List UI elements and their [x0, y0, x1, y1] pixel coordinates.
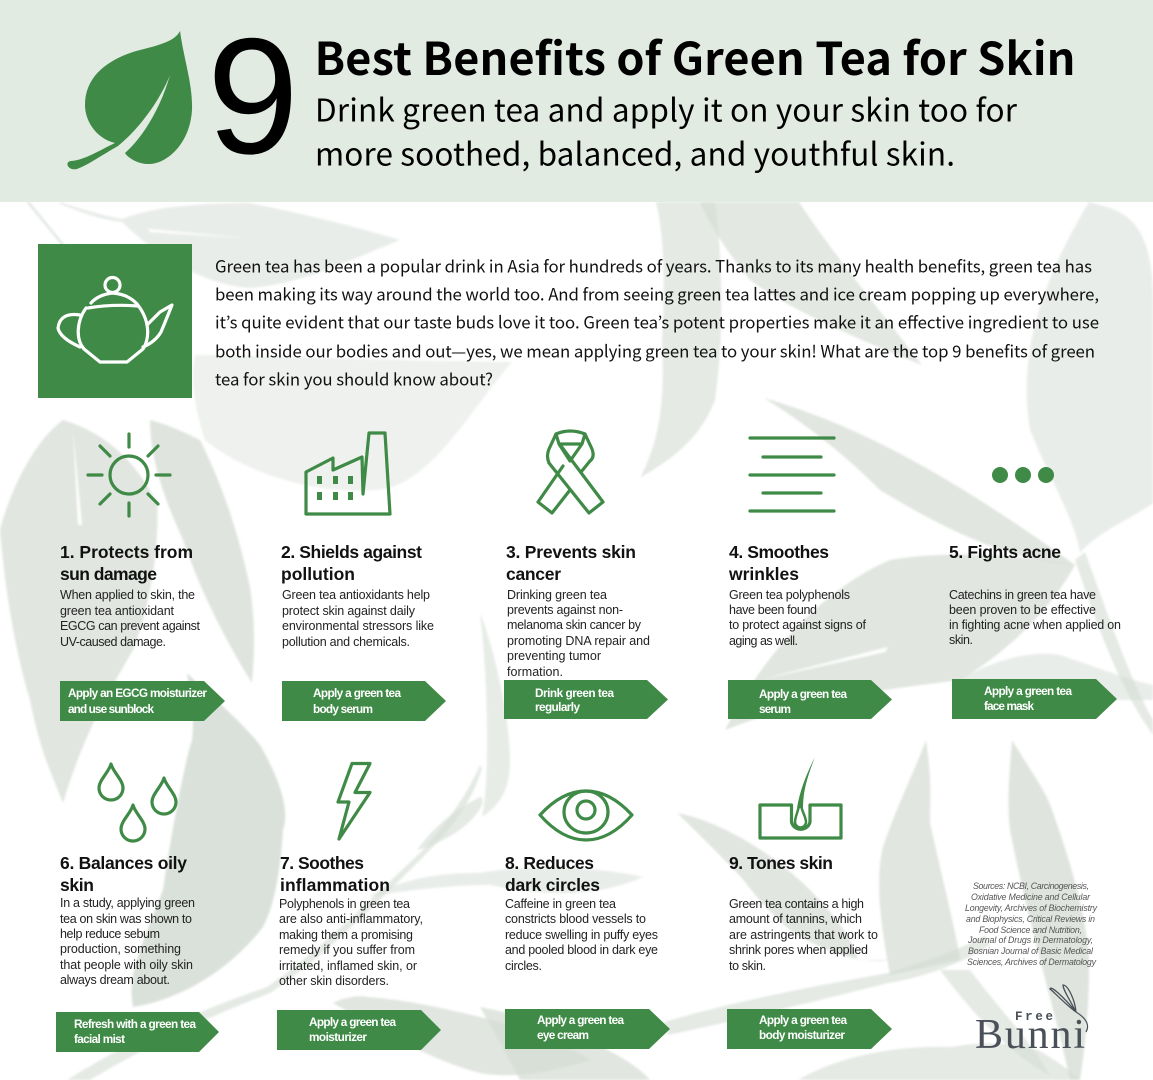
- heading 6: 6. Balances oily: [60, 853, 187, 873]
- logo: Free Bunni: Bunni: [975, 1012, 1085, 1058]
- heading 1: sun damage: [60, 564, 157, 584]
- icon: factory: [306, 433, 390, 514]
- text 3: formation.: [507, 665, 563, 679]
- icon: eye: [540, 791, 632, 840]
- text 4: [729, 588, 867, 648]
- icon: water drops: [99, 764, 176, 841]
- text 6: help reduce sebum: [60, 927, 160, 941]
- text 9: are astringents that work to: [729, 928, 878, 942]
- text 7: [279, 897, 423, 988]
- tip arrow 3: regularly: [535, 700, 580, 714]
- intro paragraph: both inside our bodies and out—yes, we mean applying green tea to your skin! What are the top 9 benefits of green: [215, 338, 1095, 362]
- big numeral 9: 9: [207, 4, 299, 188]
- heading 9: 9. Tones skin: [729, 853, 833, 873]
- panel: 9 tones skin: [727, 757, 892, 1049]
- sources: Journal of Drugs in Dermatology,: [967, 935, 1093, 945]
- text 2: protect skin against daily: [282, 604, 416, 618]
- sources: Food Science and Nutrition,: [979, 925, 1082, 935]
- tip arrow 3: [504, 680, 668, 719]
- text 7: making them a promising: [279, 928, 413, 942]
- heading 5: 5. Fights acne: [949, 542, 1061, 562]
- heading 4: [728, 542, 829, 584]
- text 6: [60, 896, 195, 987]
- heading 8: dark circles: [505, 875, 600, 895]
- text 1: When applied to skin, the: [60, 588, 195, 602]
- text 6: tea on skin was shown to: [60, 912, 192, 926]
- text 4: aging as well.: [729, 634, 798, 648]
- text 6: that people with oily skin: [60, 958, 193, 972]
- text 8: constricts blood vessels to: [505, 912, 646, 926]
- subtitle: [315, 86, 1018, 176]
- intro paragraph: Green tea has been a popular drink in Asia for hundreds of years. Thanks to its many health benefits, green tea has: [215, 254, 1092, 278]
- text 7: Polyphenols in green tea: [279, 897, 410, 911]
- text 8: Caffeine in green tea: [505, 897, 616, 911]
- sources: [965, 881, 1098, 967]
- tip arrow 2: Apply a green tea: [313, 686, 401, 700]
- tip arrow 7: moisturizer: [309, 1030, 367, 1044]
- text 7: are also anti-inflammatory,: [279, 912, 423, 926]
- heading 3: cancer: [506, 564, 561, 584]
- text 5: in fighting acne when applied on: [949, 618, 1121, 632]
- panel: teapot icon square: [38, 244, 192, 398]
- tip arrow 8: [505, 1009, 670, 1049]
- sources: and Biophysics, Critical Reviews in: [966, 914, 1095, 924]
- heading 2: [281, 542, 422, 584]
- tip arrow 1: [60, 681, 225, 721]
- heading 3: 3. Prevents skin: [506, 542, 636, 562]
- logo: Free Bunni: [975, 985, 1088, 1058]
- text 8: and pooled blood in dark eye: [505, 943, 658, 957]
- tip arrow 2: body serum: [313, 702, 373, 716]
- tip arrow 6: Refresh with a green tea: [74, 1017, 196, 1031]
- tip arrow 5: [952, 679, 1117, 719]
- text 3: melanoma skin cancer by: [507, 618, 642, 632]
- text 9: shrink pores when applied: [729, 943, 868, 957]
- heading 6: skin: [60, 875, 94, 895]
- text 6: always dream about.: [60, 973, 170, 987]
- text 8: circles.: [505, 959, 542, 973]
- tip arrow 9: Apply a green tea: [759, 1013, 847, 1027]
- header band: [0, 0, 1153, 202]
- text 1: [60, 588, 201, 649]
- text 3: prevents against non-: [507, 603, 623, 617]
- subtitle: more soothed, balanced, and youthful skin.: [315, 130, 955, 176]
- text 2: environmental stressors like: [282, 619, 434, 633]
- heading 4: 4. Smoothes: [729, 542, 829, 562]
- tip arrow 4: [728, 680, 892, 719]
- text 1: green tea antioxidant: [60, 604, 175, 618]
- tip arrow 2: [282, 681, 446, 721]
- tip arrow 7: Apply a green tea: [309, 1015, 396, 1029]
- text 4: to protect against signs of: [729, 618, 867, 632]
- text 9: to skin.: [729, 959, 766, 973]
- text 6: In a study, applying green: [60, 896, 195, 910]
- text 5: Catechins in green tea have: [949, 588, 1096, 602]
- sources: Oxidative Medicine and Cellular: [971, 892, 1091, 902]
- heading 4: wrinkles: [728, 564, 799, 584]
- tip arrow 4: serum: [759, 702, 791, 716]
- text 5: [949, 588, 1121, 647]
- text 2: Green tea antioxidants help: [282, 588, 430, 602]
- tip arrow 9: [727, 1009, 892, 1049]
- panel: 2 shields against pollution: [281, 433, 446, 721]
- heading 7: inflammation: [280, 875, 390, 895]
- heading 2: 2. Shields against: [281, 542, 422, 562]
- panel: 1 protects from sun damage: [60, 434, 225, 721]
- text 7: irritated, inflamed skin, or: [279, 959, 417, 973]
- heading 8: [505, 853, 600, 895]
- panel: 6 balances oily skin: [56, 764, 219, 1052]
- text 4: have been found: [729, 603, 817, 617]
- text 9: [729, 897, 878, 973]
- text 9: amount of tannins, which: [729, 912, 862, 926]
- text 5: been proven to be effective: [949, 603, 1096, 617]
- panel: 8 reduces dark circles: [505, 791, 670, 1049]
- text 2: [282, 588, 434, 649]
- logo: Free Bunni: Free: [1015, 1010, 1053, 1024]
- heading 3: [506, 542, 636, 584]
- text 2: pollution and chemicals.: [282, 635, 410, 649]
- sources: Longevity, Archives of Biochemistry: [965, 903, 1098, 913]
- heading 7: [280, 853, 390, 895]
- intro paragraph: been making its way around the world too. And from seeing green tea lattes and ice cream popping up everywhere,: [215, 282, 1099, 306]
- tip arrow 5: face mask: [984, 699, 1034, 713]
- title: Best Benefits of Green Tea for Skin: [314, 23, 1076, 88]
- tip arrow 8: Apply a green tea: [537, 1013, 624, 1027]
- text 8: [505, 897, 658, 973]
- text 5: skin.: [949, 633, 973, 647]
- text 9: Green tea contains a high: [729, 897, 864, 911]
- text 3: preventing tumor: [507, 649, 601, 663]
- icon: green leaf logo: [67, 31, 192, 169]
- panel: 3 prevents skin cancer: [504, 431, 668, 719]
- heading 1: 1. Protects from: [60, 542, 193, 562]
- sources: Sources: NCBI, Carcinogenesis,: [973, 881, 1089, 891]
- sources: Bosnian Journal of Basic Medical: [968, 946, 1094, 956]
- tip arrow 4: Apply a green tea: [759, 687, 847, 701]
- text 1: EGCG can prevent against: [60, 619, 201, 633]
- icon: rabbit ears: [1050, 985, 1088, 1032]
- heading 2: pollution: [281, 564, 355, 584]
- tip arrow 1: and use sunblock: [68, 702, 154, 716]
- heading 7: 7. Soothes: [280, 853, 364, 873]
- text 8: reduce swelling in puffy eyes: [505, 928, 658, 942]
- icon: ribbon: [538, 431, 603, 513]
- panel: 4 smoothes wrinkles: [728, 438, 892, 719]
- icon: wrinkle lines: [750, 438, 834, 511]
- tip arrow 5: Apply a green tea: [984, 684, 1072, 698]
- text 4: Green tea polyphenols: [729, 588, 850, 602]
- text 6: production, something: [60, 942, 181, 956]
- text 1: UV-caused damage.: [60, 635, 166, 649]
- text 7: other skin disorders.: [279, 974, 389, 988]
- text 3: Drinking green tea: [507, 588, 607, 602]
- panel: 7 soothes inflammation: [277, 764, 441, 1050]
- icon: three dots: [992, 467, 1054, 483]
- text 3: [507, 588, 650, 679]
- tip arrow 1: Apply an EGCG moisturizer: [68, 686, 207, 700]
- icon: lightning bolt: [338, 764, 370, 839]
- tip arrow 8: eye cream: [537, 1028, 589, 1042]
- tip arrow 9: body moisturizer: [759, 1028, 845, 1042]
- heading 1: [60, 542, 193, 584]
- sources: Sciences, Archives of Dermatology: [967, 957, 1097, 967]
- tip arrow 6: facial mist: [74, 1032, 125, 1046]
- tip arrow 7: [277, 1010, 441, 1050]
- panel: 5 fights acne: [949, 467, 1121, 719]
- heading 6: [60, 853, 187, 895]
- heading 8: 8. Reduces: [505, 853, 594, 873]
- tip arrow 3: Drink green tea: [535, 686, 614, 700]
- icon: hair follicle: [760, 757, 841, 838]
- tip arrow 6: [56, 1012, 219, 1052]
- intro paragraph: tea for skin you should know about?: [215, 366, 493, 390]
- text 7: remedy if you suffer from: [279, 943, 415, 957]
- text 3: promoting DNA repair and: [507, 634, 650, 648]
- icon: sun: [88, 434, 170, 516]
- intro paragraph: it’s quite evident that our taste buds love it too. Green tea’s potent properties make it an effective ingredient to use: [215, 310, 1099, 334]
- subtitle: Drink green tea and apply it on your skin too for: [315, 86, 1018, 132]
- intro paragraph: [215, 254, 1099, 390]
